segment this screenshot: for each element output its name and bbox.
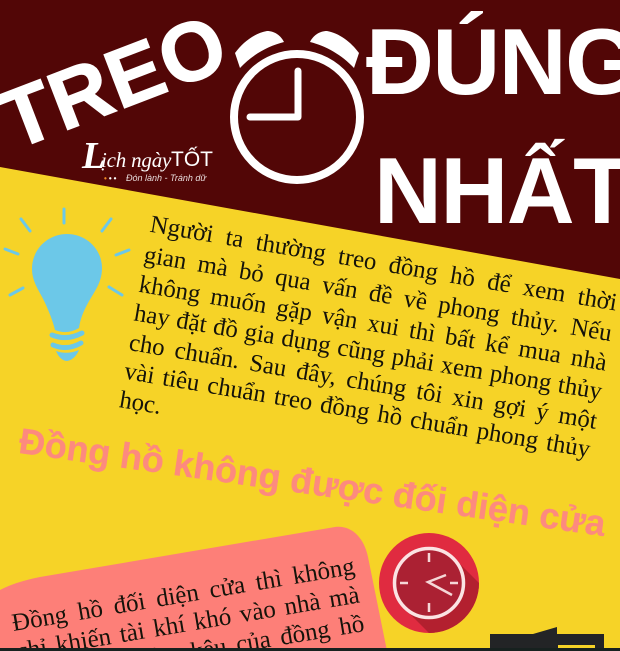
icon: red clock xyxy=(379,533,479,633)
logo: Lịch ngày Tốt: ịch ngày xyxy=(101,148,171,172)
card text: Đồng hồ đối diện cửa thì không xyxy=(10,553,357,637)
logo: Lịch ngày Tốt: TỐT xyxy=(171,148,213,171)
icon: alarm clock xyxy=(230,31,364,184)
logo: Lịch ngày Tốt: Đón lành - Tránh dữ xyxy=(126,173,206,183)
section heading: Đồng hồ không được đối diện cửa xyxy=(17,420,608,544)
logo: Lịch ngày Tốt: ••• xyxy=(104,174,118,183)
intro paragraph: Người ta thường treo đồng hồ để xem thời xyxy=(148,210,619,316)
header background xyxy=(0,0,620,279)
bottom strip xyxy=(0,648,620,651)
intro paragraph: cho chuẩn. Sau đây, chúng tôi xin gợi ý một xyxy=(127,329,599,434)
pink text card xyxy=(0,526,386,648)
icon: door xyxy=(490,627,604,648)
intro paragraph: hay đặt đồ gia dụng cũng phải xem phong thủy xyxy=(132,300,604,405)
intro paragraph xyxy=(117,210,619,463)
logo: Lịch ngày Tốt: L xyxy=(82,135,105,177)
intro paragraph: học. xyxy=(117,387,163,420)
intro paragraph: vài tiêu chuẩn treo đồng hồ chuẩn phong thủy xyxy=(122,358,592,463)
intro paragraph: không muốn gặp vận xui thì bất kể mua nhà xyxy=(137,271,609,376)
logo: Lịch ngày Tốt xyxy=(82,135,213,183)
icon: light bulb xyxy=(4,208,130,361)
intro paragraph: gian mà bỏ qua vấn đề về phong thủy. Nếu xyxy=(142,242,614,347)
